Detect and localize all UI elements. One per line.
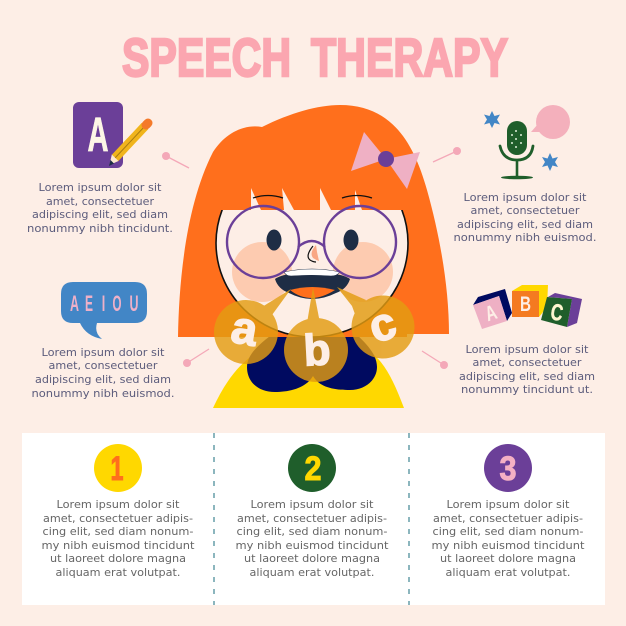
speech bubble a: [214, 289, 291, 364]
text block: top left: nonummy nibh tincidunt.: [27, 223, 173, 235]
step 1 text: ut laoreet dolore magna: [50, 553, 186, 565]
text block: bottom right: nonummy tincidunt ut.: [461, 384, 593, 396]
text block: bottom left: [32, 347, 174, 400]
connector: top right: [433, 147, 461, 162]
face: [215, 210, 409, 338]
icon: AEIOU speech bubble: U: [130, 291, 138, 316]
text block: top right: Lorem ipsum dolor sit: [464, 192, 586, 204]
step 3 text: Lorem ipsum dolor sit: [446, 499, 570, 511]
title: [122, 28, 508, 88]
step 3 badge: 3: [500, 450, 516, 488]
body: yellow shirt: [213, 352, 404, 408]
icon: ABC blocks: B: [520, 293, 531, 316]
icon: AEIOU speech bubble: [61, 282, 147, 339]
step 2 text: my nibh euismod tincidunt: [236, 540, 388, 552]
text block: top right: [454, 192, 596, 244]
text block: top left: adipiscing elit, sed diam: [32, 209, 168, 221]
step 2 text: Lorem ipsum dolor sit: [250, 499, 374, 511]
text block: top left: Lorem ipsum dolor sit: [38, 182, 162, 194]
connector: bottom right: [422, 351, 448, 369]
letter c: c: [362, 295, 402, 353]
icon: letter card with pencil: [73, 102, 148, 168]
step 1 badge: [94, 444, 142, 492]
letter b: b: [302, 325, 332, 376]
panel: numbered steps: [22, 433, 605, 605]
icon: ABC blocks: A: [482, 301, 500, 326]
title: SPEECH: [122, 28, 291, 88]
text block: bottom left: amet, consectetuer: [48, 360, 158, 372]
step 3 text: aliquam erat volutpat.: [446, 567, 570, 579]
connector: bottom left: [183, 349, 209, 367]
icon: ABC blocks: [473, 285, 582, 329]
eyes: [266, 230, 358, 250]
step 1 text: [42, 499, 194, 579]
bow tie: [247, 330, 377, 392]
step 3 text: ut laoreet dolore magna: [440, 553, 576, 565]
icon: AEIOU speech bubble: I: [102, 291, 105, 316]
text block: bottom right: adipiscing elit, sed diam: [459, 371, 595, 383]
step 1 badge: 1: [110, 450, 124, 488]
bow hair clip: [351, 132, 420, 189]
hair: [178, 105, 449, 337]
icon: AEIOU speech bubble: A: [70, 291, 79, 316]
icon: ABC blocks: C: [549, 298, 565, 326]
text block: top right: nonummy nibh euismod.: [454, 232, 596, 244]
step 1 text: Lorem ipsum dolor sit: [56, 499, 180, 511]
connector: top left: [162, 152, 189, 168]
step 3 text: amet, consectetuer adipis-: [433, 513, 583, 525]
mouth: [275, 269, 350, 299]
eyebrows: [253, 196, 372, 198]
icon: AEIOU speech bubble: O: [112, 291, 122, 316]
step 2 badge: [288, 444, 336, 492]
step 2 text: [236, 499, 388, 579]
text block: top left: [27, 182, 173, 235]
step 3 text: cing elit, sed diam nonum-: [432, 526, 584, 538]
step 1 text: cing elit, sed diam nonum-: [42, 526, 194, 538]
speech bubble c: [337, 287, 414, 358]
title: THERAPY: [311, 28, 508, 88]
step 1 text: my nibh euismod tincidunt: [42, 540, 194, 552]
text block: bottom right: Lorem ipsum dolor sit: [466, 344, 588, 356]
step 2 text: cing elit, sed diam nonum-: [236, 526, 388, 538]
icon: AEIOU speech bubble: E: [85, 291, 93, 316]
text block: top right: amet, consectetuer: [470, 205, 580, 217]
step 2 text: ut laoreet dolore magna: [244, 553, 380, 565]
bangs notches: [251, 188, 362, 210]
text block: bottom right: [459, 344, 595, 396]
letter a: a: [228, 300, 262, 356]
text block: bottom left: Lorem ipsum dolor sit: [42, 347, 164, 359]
step 2 badge: 2: [304, 450, 322, 488]
icon: letter card with pencil: A: [88, 109, 108, 162]
icon: microphone with stars and bubble: [484, 105, 570, 179]
step 3 badge: [484, 444, 532, 492]
step 2 text: aliquam erat volutpat.: [250, 567, 374, 579]
text block: top right: adipiscing elit, sed diam: [457, 219, 593, 231]
step 3 text: my nibh euismod tincidunt: [432, 540, 584, 552]
step 2 text: amet, consectetuer adipis-: [237, 513, 387, 525]
illustration: girl: [178, 105, 449, 408]
speech bubble b: [284, 287, 348, 382]
text block: bottom left: adipiscing elit, sed diam: [35, 374, 171, 386]
step 1 text: aliquam erat volutpat.: [56, 567, 180, 579]
glasses: [227, 206, 396, 278]
text block: bottom left: nonummy nibh euismod.: [32, 388, 174, 400]
text block: bottom right: amet, consectetuer: [472, 357, 582, 369]
nose: [308, 245, 319, 262]
step 3 text: [432, 499, 584, 579]
cheeks: [232, 242, 393, 302]
step 1 text: amet, consectetuer adipis-: [43, 513, 193, 525]
text block: top left: amet, consectetuer: [46, 196, 155, 208]
